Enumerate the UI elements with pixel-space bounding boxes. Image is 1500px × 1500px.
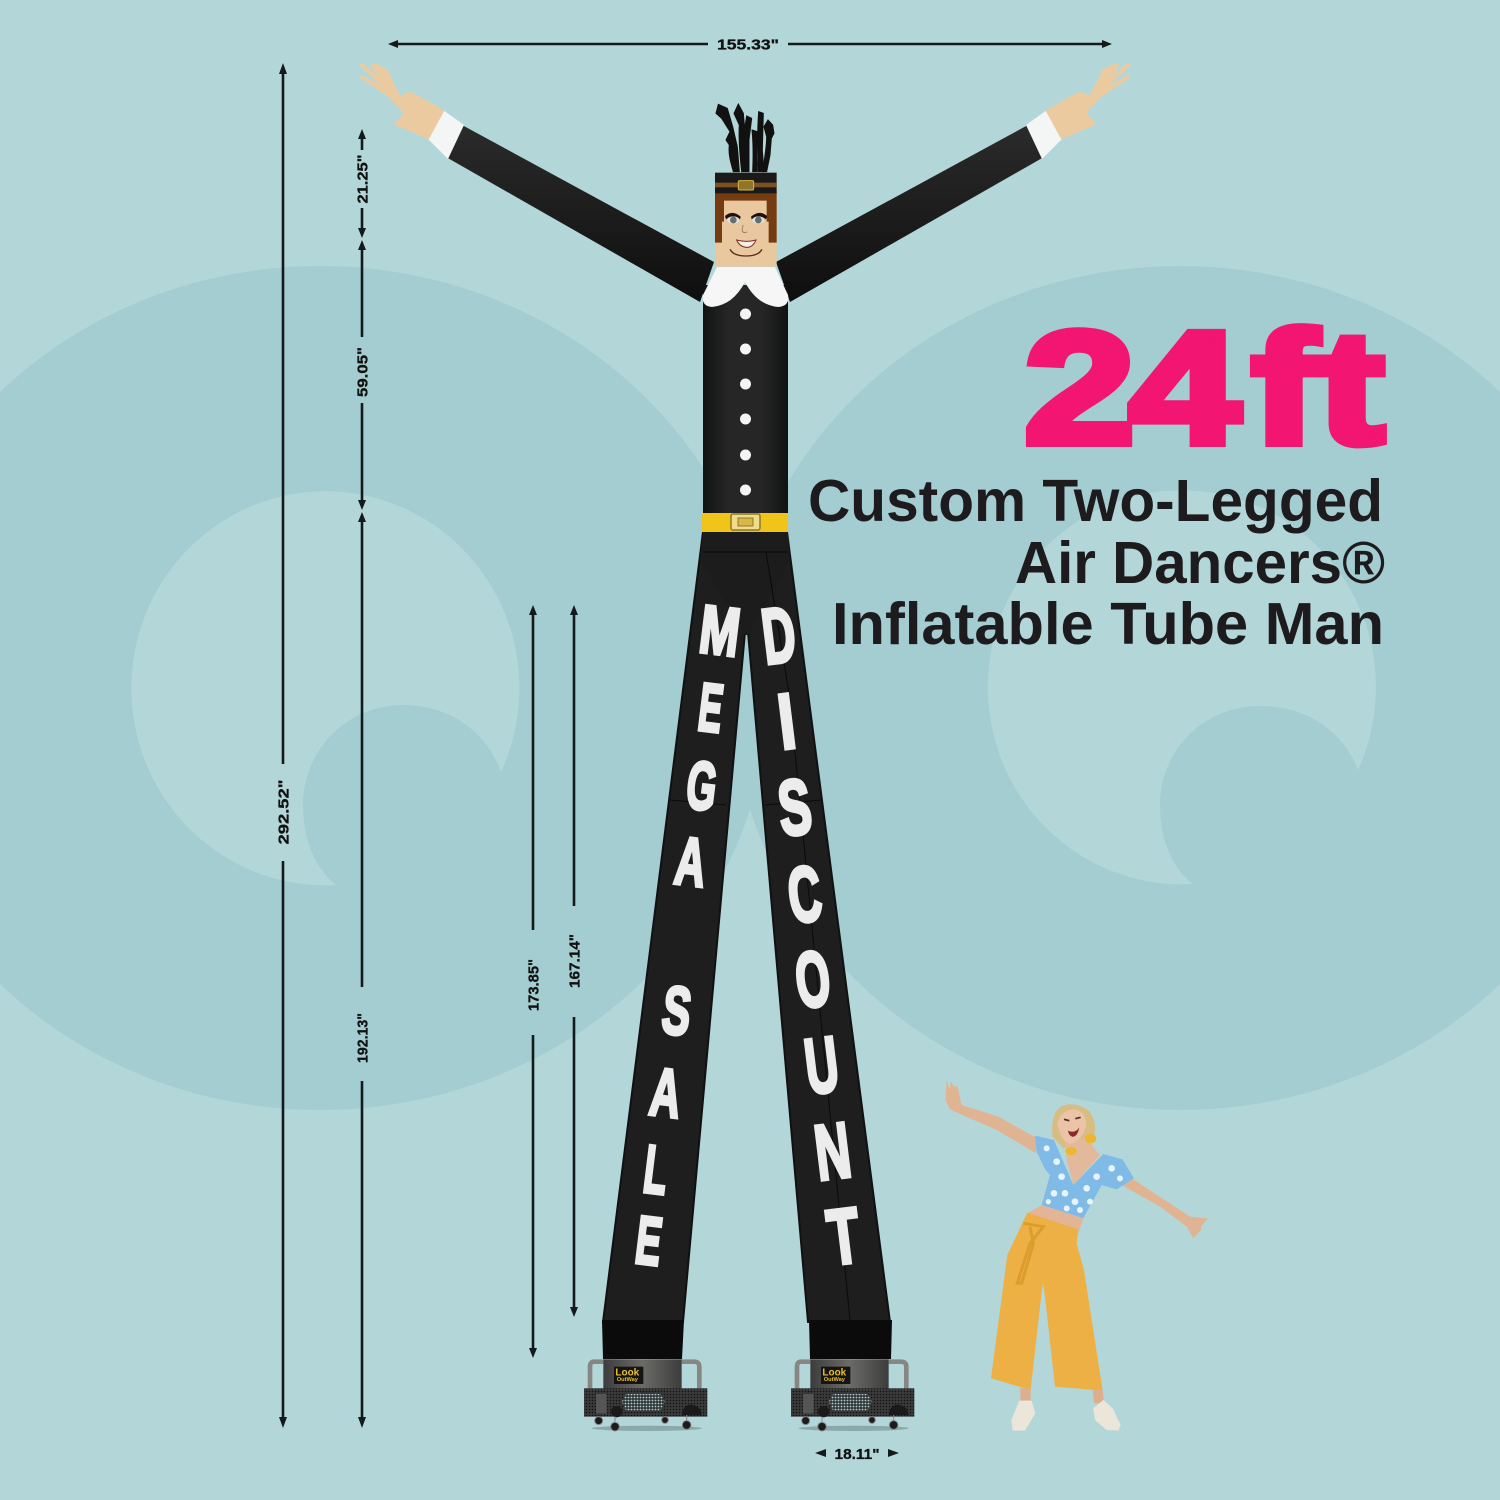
right cuff xyxy=(1026,110,1063,159)
right arm xyxy=(776,125,1044,302)
right ankle sleeve xyxy=(809,1320,892,1359)
blower: left xyxy=(584,1359,707,1431)
wheels xyxy=(802,1415,898,1431)
wheel bumpers xyxy=(818,1405,909,1417)
cylinder xyxy=(603,1359,682,1389)
letters: DISCOUNT: T xyxy=(823,1192,865,1282)
letters: DISCOUNT: I xyxy=(773,677,800,766)
dimension: torso 59.05 xyxy=(354,240,372,510)
filter panel xyxy=(622,1394,665,1411)
logo badge xyxy=(821,1367,850,1384)
letters: DISCOUNT xyxy=(757,590,865,1282)
right leg xyxy=(748,532,890,1322)
dimension: left leg 173.85: 173.85" xyxy=(526,959,542,1011)
hat band xyxy=(715,183,777,187)
mesh base xyxy=(791,1388,914,1417)
side plate xyxy=(596,1394,607,1413)
dimension: left leg 173.85 xyxy=(526,605,542,1358)
right hand xyxy=(1047,64,1130,138)
shadow xyxy=(592,1426,702,1431)
head xyxy=(715,173,777,267)
logo badge: OutWay xyxy=(617,1377,639,1383)
ankles xyxy=(1020,1388,1104,1403)
blower: right xyxy=(791,1359,914,1431)
dimension: hat and head 21.25 xyxy=(354,129,372,238)
letters: DISCOUNT: C xyxy=(783,849,826,940)
background swirl: left xyxy=(0,266,769,1110)
letters: MEGA SALE: E xyxy=(632,1201,666,1280)
dimension: torso 59.05: 59.05" xyxy=(354,347,372,397)
handles xyxy=(797,1362,906,1388)
logo badge xyxy=(614,1367,643,1384)
hips xyxy=(700,532,790,635)
title: product name: Custom Two-Legged xyxy=(808,468,1383,534)
handles xyxy=(590,1362,699,1388)
dimension: legs 192.13 xyxy=(354,512,372,1428)
letters: DISCOUNT: N xyxy=(810,1105,855,1197)
letters: MEGA SALE: M xyxy=(695,592,744,671)
left hand xyxy=(360,64,443,138)
feathers xyxy=(716,104,774,172)
letters: DISCOUNT: D xyxy=(757,590,800,681)
title: product name xyxy=(808,468,1385,657)
seams xyxy=(670,552,850,1320)
shadow xyxy=(799,1426,909,1431)
eyes xyxy=(725,213,767,224)
hat buckle xyxy=(738,181,754,190)
left cuff xyxy=(427,110,464,159)
hat xyxy=(715,173,777,193)
logo badge: OutWay xyxy=(824,1377,846,1383)
tube man xyxy=(360,64,1130,1359)
background swirl: right xyxy=(731,266,1500,1110)
dimension: right leg 167.14 xyxy=(566,605,584,1317)
filter panel xyxy=(829,1394,872,1411)
mouth xyxy=(730,225,762,256)
letters: MEGA SALE xyxy=(632,592,744,1280)
mesh base xyxy=(584,1388,707,1417)
earrings xyxy=(1065,1134,1096,1155)
midriff xyxy=(1027,1205,1083,1233)
dimension: overall width 155.33 xyxy=(388,36,1112,54)
dimension: legs 192.13: 192.13" xyxy=(354,1013,372,1063)
letters: MEGA SALE: A xyxy=(646,1053,686,1132)
blue top xyxy=(1035,1136,1134,1218)
dimension: right leg 167.14: 167.14" xyxy=(566,934,584,988)
buttons xyxy=(740,308,751,496)
letters: MEGA SALE: G xyxy=(682,746,721,826)
dimension: overall height 292.52: 292.52" xyxy=(276,780,292,844)
left arm xyxy=(446,125,714,302)
side plate xyxy=(803,1394,814,1413)
letters: MEGA SALE: S xyxy=(658,971,695,1050)
letters: MEGA SALE: L xyxy=(640,1130,672,1209)
smile and eyes xyxy=(1064,1117,1081,1137)
dimension: hat and head 21.25: 21.25" xyxy=(354,154,372,204)
letters: DISCOUNT: S xyxy=(773,762,816,853)
woman for scale xyxy=(945,1081,1208,1431)
left leg xyxy=(603,532,745,1322)
title: product name: Inflatable Tube Man xyxy=(832,591,1384,657)
letters: DISCOUNT: O xyxy=(791,935,835,1025)
pants tie xyxy=(1017,1223,1043,1283)
arms xyxy=(945,1081,1208,1238)
belt xyxy=(702,513,788,532)
logo badge: Look xyxy=(615,1367,640,1378)
letters: DISCOUNT: U xyxy=(800,1020,843,1111)
pants xyxy=(991,1213,1103,1391)
dimension: blower width 18.11 xyxy=(815,1446,899,1463)
dimension: overall height 292.52 xyxy=(276,63,292,1428)
shoes xyxy=(1011,1400,1121,1431)
title: product name: Air Dancers® xyxy=(1015,530,1385,596)
dimension: overall width 155.33: 155.33" xyxy=(717,36,779,54)
cylinder xyxy=(810,1359,889,1389)
hair xyxy=(1052,1104,1095,1148)
hair xyxy=(715,192,777,243)
wheels xyxy=(595,1415,691,1431)
letters: MEGA SALE: A xyxy=(671,822,711,901)
face xyxy=(1057,1109,1086,1144)
polka dots xyxy=(1044,1145,1123,1213)
wheel bumpers xyxy=(611,1405,702,1417)
letters: MEGA SALE: E xyxy=(694,670,727,747)
neck and chest xyxy=(1065,1138,1100,1185)
logo badge: Look xyxy=(822,1367,847,1378)
dimension: blower width 18.11: 18.11" xyxy=(834,1446,880,1463)
face xyxy=(715,173,777,267)
left ankle sleeve xyxy=(602,1320,684,1359)
torso xyxy=(703,285,788,515)
collar xyxy=(703,267,788,307)
headline: 24ft: 24ft xyxy=(1024,299,1384,477)
